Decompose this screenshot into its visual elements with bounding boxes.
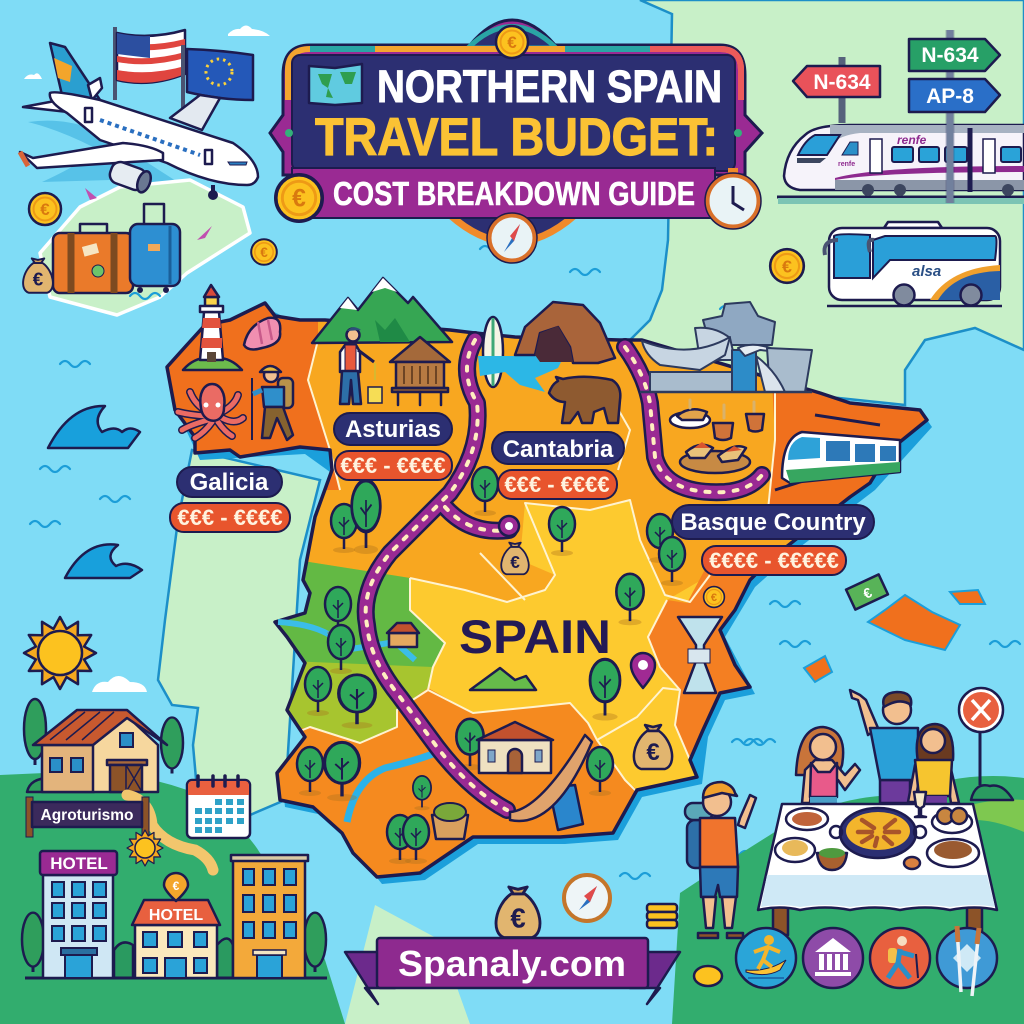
icon: hotel middle: € [173, 879, 180, 893]
sign: AP-8 blue [909, 79, 1000, 112]
navy panel [292, 55, 735, 171]
purple band [292, 168, 715, 218]
icon: orange suitcase [53, 224, 133, 293]
icon: hotel middle: HOTEL [149, 907, 203, 924]
icon: hotel middle [132, 873, 220, 978]
icon: EU flag [183, 45, 253, 108]
icon: surf badge [736, 928, 796, 988]
map of Spain [150, 290, 950, 900]
land: North Africa [345, 905, 470, 1024]
road signs [793, 30, 1000, 203]
path through hills [127, 795, 213, 870]
plate left top [786, 808, 828, 830]
icon: flower [127, 830, 163, 866]
sign: N-634 green [909, 39, 1000, 71]
icon: compass [487, 213, 537, 263]
icon: US flag [115, 27, 185, 100]
trees [297, 467, 685, 864]
salad bowl [817, 848, 847, 870]
regions [168, 306, 925, 876]
icon: hiker [252, 366, 293, 440]
girl right [908, 724, 959, 804]
land: Portugal [158, 450, 320, 815]
label: Galicia: €€€ - €€€€ [177, 505, 283, 530]
icon: cider pourer [340, 327, 382, 404]
icon: coin ground [694, 966, 722, 986]
label: Galicia: Galicia [190, 469, 269, 496]
label: Cantabria [492, 432, 624, 499]
icon: money bag bottom [496, 887, 540, 938]
sign: N-634 red [793, 66, 880, 97]
icon: backpacker [685, 782, 756, 938]
bottom-left green hills [0, 772, 345, 1024]
footer banner [345, 938, 680, 1004]
route: east [625, 347, 762, 492]
icon: coin [29, 193, 61, 225]
icon: trekking poles badge [937, 926, 997, 996]
icon: no cutlery sign [959, 688, 1013, 800]
sign: Agroturismo: Agroturismo [40, 807, 134, 824]
paella [830, 808, 926, 858]
wine glass [914, 792, 926, 817]
trees beside hotels [22, 913, 326, 978]
icon: calendar [187, 776, 250, 838]
icon: mountains [312, 278, 452, 343]
frame stripes [288, 49, 741, 100]
icon: water pool [478, 353, 565, 392]
lime hill patch [970, 800, 1024, 832]
river south [347, 748, 448, 822]
sign: N-634 red: N-634 [813, 71, 871, 94]
icon: cloud [92, 676, 147, 692]
waves in the sea [30, 246, 1020, 879]
icon: banknote: € [861, 584, 875, 602]
icon: seashell [244, 318, 280, 349]
title line 3: COST BREAKDOWN GUIDE [333, 175, 695, 212]
plate left bottom [775, 838, 815, 862]
label: Basque Country [672, 505, 874, 575]
icon: rail track [777, 197, 1024, 204]
icon: small money bag [23, 258, 53, 293]
arc below banner [450, 215, 575, 242]
icon: dinner table [758, 792, 997, 935]
icon: museum badge [803, 928, 863, 988]
plane shadow [28, 121, 190, 193]
label: Asturias [334, 413, 452, 480]
icon: map pin [631, 653, 655, 688]
bottom-right green hill [672, 776, 1024, 1024]
river [278, 622, 415, 660]
banner colored frame [270, 20, 762, 175]
text: SPAIN: SPAIN [459, 610, 611, 663]
sign: Agroturismo [26, 797, 149, 837]
icon: red sign post [838, 57, 846, 123]
icon: hiking badge [870, 928, 930, 988]
icon: alsa bus [825, 222, 1002, 306]
icon: green hill [470, 668, 536, 690]
island under luggage [40, 180, 250, 315]
icon: surfboard [483, 317, 503, 387]
icon: blue suitcase [130, 204, 180, 293]
icon: world map [309, 64, 362, 105]
icon: cave [515, 302, 615, 363]
sign: AP-8 blue: AP-8 [926, 85, 974, 108]
woman left [796, 727, 860, 804]
icon: bear [549, 377, 620, 423]
label: Asturias: €€€ - €€€€ [340, 453, 446, 478]
icon: route pin [499, 516, 519, 536]
icon: coin on map [704, 587, 724, 607]
icon: hotel left: HOTEL [50, 854, 108, 873]
icon: sun [24, 617, 96, 689]
icon: lighthouse [183, 285, 242, 370]
icon: hotel right [231, 855, 308, 978]
label: Basque Country: Basque Country [680, 509, 866, 536]
icon: small wave [65, 544, 142, 578]
sign: N-634 green: N-634 [921, 44, 979, 67]
icon: renfe train: renfe [838, 161, 855, 168]
man center [850, 690, 918, 803]
top arc [468, 26, 556, 48]
icon: farmhouse [24, 699, 183, 792]
icon: coin near compass [251, 239, 277, 265]
route: tan end [510, 735, 592, 821]
icon: compass bottom [564, 875, 610, 921]
ground line [25, 976, 327, 980]
icon: left coin [276, 175, 322, 221]
icon: stopwatch [705, 168, 761, 229]
Balearic islands [804, 590, 985, 682]
title banner [270, 20, 762, 263]
icon: hotel left [40, 851, 117, 978]
icon: flamenco fan [549, 785, 583, 830]
icon: birds [85, 188, 212, 240]
icon: small house [387, 623, 419, 647]
icon: octopus [178, 384, 243, 438]
icon: top coin [496, 26, 528, 58]
icon: alsa bus: alsa [912, 263, 941, 280]
coast shadow [172, 310, 932, 884]
icon: windmill [678, 617, 722, 693]
label: Basque Country: €€€€ - €€€€€ [709, 548, 839, 573]
coastline [167, 303, 927, 877]
label: Cantabria: Cantabria [503, 436, 614, 463]
plate right top [932, 808, 972, 833]
small bowl [904, 857, 920, 869]
icon: basket [432, 803, 468, 839]
icon: horreo granary [390, 337, 450, 405]
label: Cantabria: €€€ - €€€€ [504, 472, 610, 497]
icon: pintxos [670, 400, 764, 473]
icon: coin near bus [770, 249, 804, 283]
title line 1: NORTHERN SPAIN [377, 61, 722, 112]
land: France coast [625, 0, 1024, 405]
plate right bottom [927, 839, 979, 867]
flags [115, 27, 253, 108]
icon: big wave [48, 406, 140, 448]
label: Galicia [170, 467, 290, 532]
icon: monastery [477, 722, 553, 773]
icon: money bag on route [501, 543, 529, 574]
icon: coin stack [647, 904, 677, 928]
icon: money bag [634, 725, 672, 769]
icon: Guggenheim museum [640, 302, 812, 392]
icon: airplane [20, 43, 258, 200]
side dots [285, 129, 742, 137]
icon: metro train [775, 415, 900, 490]
icon: renfe train [784, 125, 1024, 196]
icon: banknote [846, 574, 888, 610]
footer banner: Spanaly.com [398, 943, 626, 984]
icon: renfe train: renfe [897, 133, 927, 147]
icon: family [796, 690, 959, 804]
route: main [366, 340, 509, 810]
label: Asturias: Asturias [345, 416, 441, 443]
title line 2: TRAVEL BUDGET: [315, 108, 718, 167]
sea clouds [24, 26, 270, 79]
